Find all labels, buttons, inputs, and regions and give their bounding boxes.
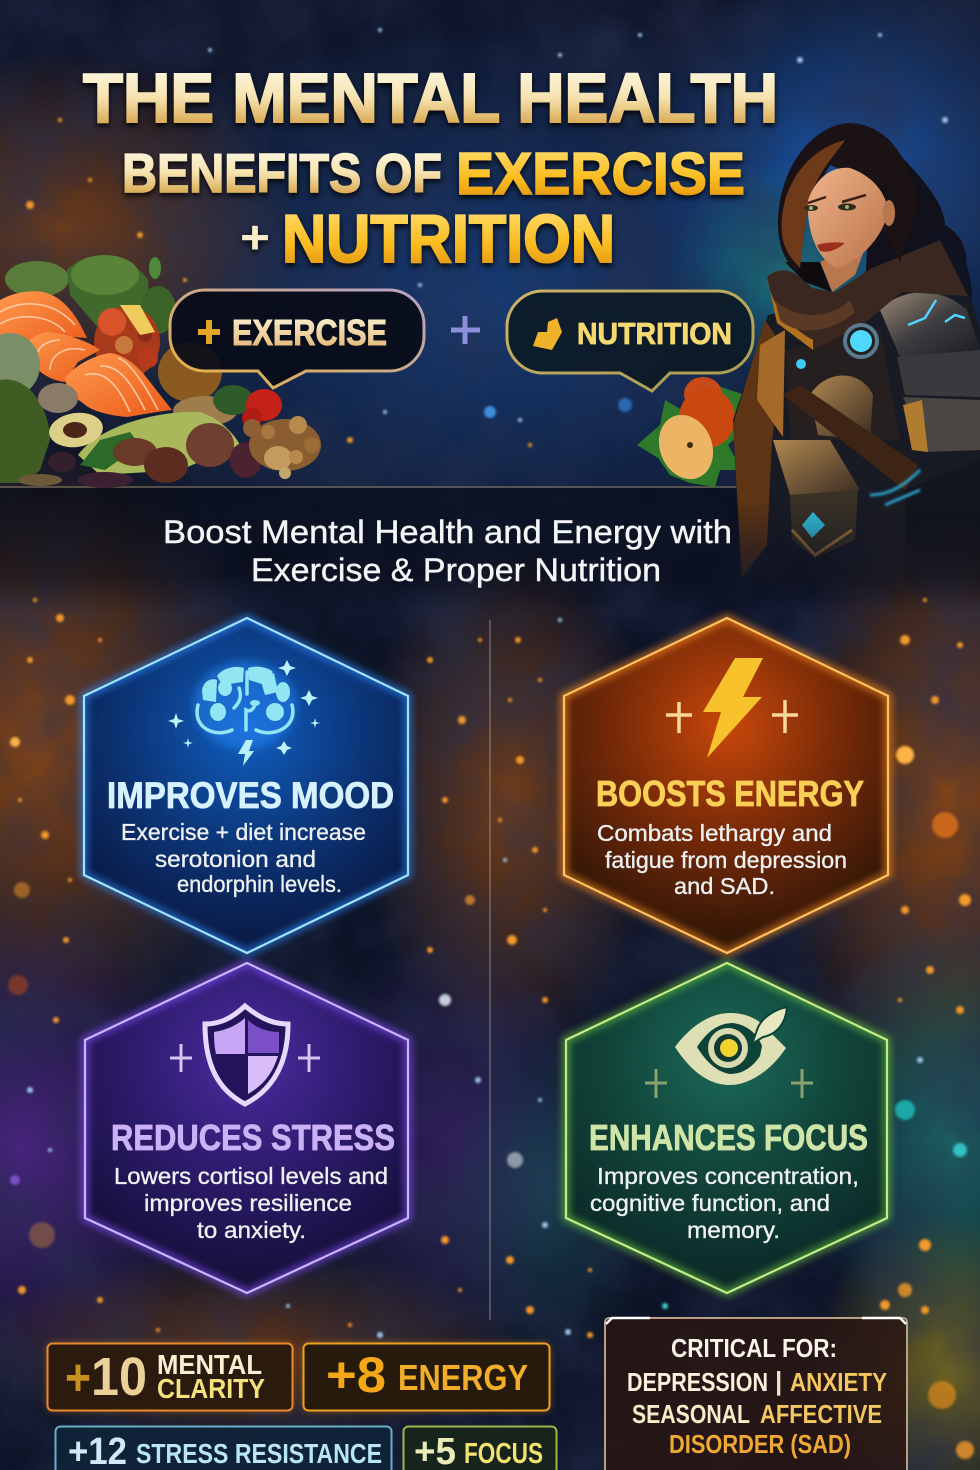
heading: ENHANCES FOCUS [589,1117,868,1158]
description: Exercise + diet increase [121,819,366,845]
description: Combats lethargy and [597,820,832,846]
scarf [767,240,968,350]
exercise speech bubble: EXERCISE [232,312,387,353]
heading: BOOSTS ENERGY [596,773,864,814]
stat badge: mental clarity: MENTAL [157,1349,262,1380]
title: THE MENTAL HEALTH [83,59,778,137]
icon: eye with leaf [675,1007,787,1085]
stat badge: focus [404,1426,556,1470]
character: armored woman [733,123,980,600]
nutrition speech bubble: NUTRITION [577,316,732,351]
icon: lightning bolt [703,658,763,758]
heading: REDUCES STRESS [111,1117,395,1158]
stat badge: mental clarity: + [65,1349,91,1407]
description: memory. [687,1217,780,1243]
description [114,1163,388,1243]
description: and SAD. [674,873,775,899]
description [590,1163,859,1243]
callout: critical for: AFFECTIVE [760,1399,882,1429]
callout: critical for: DEPRESSION [627,1367,768,1397]
stat badge: energy [304,1344,550,1410]
stat badge: mental clarity: 10 [91,1347,147,1407]
section divider [0,486,980,1320]
callout: critical for [605,1318,907,1470]
sparkles [168,660,320,755]
icon: sparkle plus marks [170,1044,320,1072]
neck [820,252,864,292]
glowing gems [850,330,872,352]
callout: critical for: ANXIETY [790,1367,887,1397]
description: to anxiety. [197,1217,306,1243]
panel: improves mood [84,618,408,953]
panel: enhances focus [566,963,887,1293]
description: cognitive function, and [590,1190,830,1216]
icon: sparkle plus marks [645,1069,813,1098]
hood [956,264,972,298]
description [121,819,366,897]
body [733,292,980,540]
stat badge: energy: +8 [326,1347,386,1403]
icon: sparkle plus marks [666,700,798,733]
stat badge: energy: ENERGY [398,1357,528,1398]
icon: shield [205,1006,288,1104]
hair [778,123,902,272]
subtitle: Exercise & Proper Nutrition [251,552,661,588]
description: Improves concentration, [597,1163,859,1189]
exercise speech bubble [170,290,424,388]
plus sign [451,316,480,344]
icon: brain [168,660,320,766]
title: NUTRITION [282,201,615,277]
description [597,820,847,899]
description: Lowers cortisol levels and [114,1163,388,1189]
callout: critical for: SEASONAL [632,1399,750,1429]
description: serotonion and [155,846,316,872]
description: endorphin levels. [177,871,342,897]
stat badge: focus: FOCUS [464,1438,543,1470]
back hair [866,157,966,272]
panel: reduces stress [85,963,408,1293]
nutrition speech bubble [507,291,753,391]
title: EXERCISE [456,141,745,207]
subtitle [163,514,732,588]
stat badge: mental clarity: CLARITY [157,1373,265,1404]
title [83,59,778,277]
fruit illustration [637,377,745,487]
stat badge: mental clarity [48,1344,292,1410]
panel: boosts energy [564,618,888,953]
stat badge: stress resistance: STRESS RESISTANCE [136,1438,382,1469]
food pile illustration [0,255,321,488]
description: fatigue from depression [605,847,847,873]
callout: critical for: CRITICAL FOR: [671,1333,837,1363]
callout: critical for: | [775,1366,782,1396]
description: improves resilience [144,1190,352,1216]
stat badge: stress resistance [56,1426,392,1470]
subtitle: Boost Mental Health and Energy with [163,514,732,550]
title: BENEFITS OF [122,142,442,204]
title: + [240,211,270,263]
callout: critical for: DISORDER (SAD) [669,1429,851,1459]
face [808,168,888,268]
heading: IMPROVES MOOD [107,775,394,816]
